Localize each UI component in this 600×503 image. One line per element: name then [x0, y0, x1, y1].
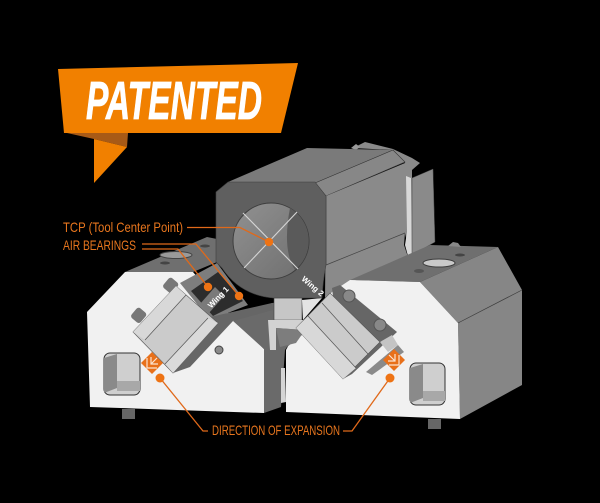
label: wing 1: Wing 1 [206, 284, 231, 310]
callout: direction of expansion [156, 374, 394, 438]
banner title: PATENTED [86, 71, 262, 131]
label: wing 2: Wing 2 [300, 275, 326, 299]
icon: left expansion arrow [141, 352, 163, 374]
machine: left base block [87, 237, 264, 413]
slots and feet on the base blocks [104, 353, 445, 429]
machine: wing 2 module [296, 285, 404, 379]
machine: tool block front face with target disc [216, 182, 326, 299]
bolts [130, 277, 179, 324]
callout: air bearings: AIR BEARINGS [63, 237, 136, 253]
icon: right expansion arrow [383, 349, 405, 371]
callout: air bearings [63, 237, 243, 300]
callout: direction of expansion: DIRECTION OF EXPANSION [212, 422, 340, 438]
machine: wing 1 module [130, 263, 273, 373]
callout: TCP: TCP (Tool Center Point) [63, 219, 183, 235]
banner: patented [58, 63, 298, 183]
bolts [343, 290, 386, 331]
machine: central tool block [228, 142, 435, 300]
machine: centre column and linkage [233, 298, 322, 413]
machine: right base block [286, 242, 522, 419]
callout: TCP [63, 219, 273, 246]
